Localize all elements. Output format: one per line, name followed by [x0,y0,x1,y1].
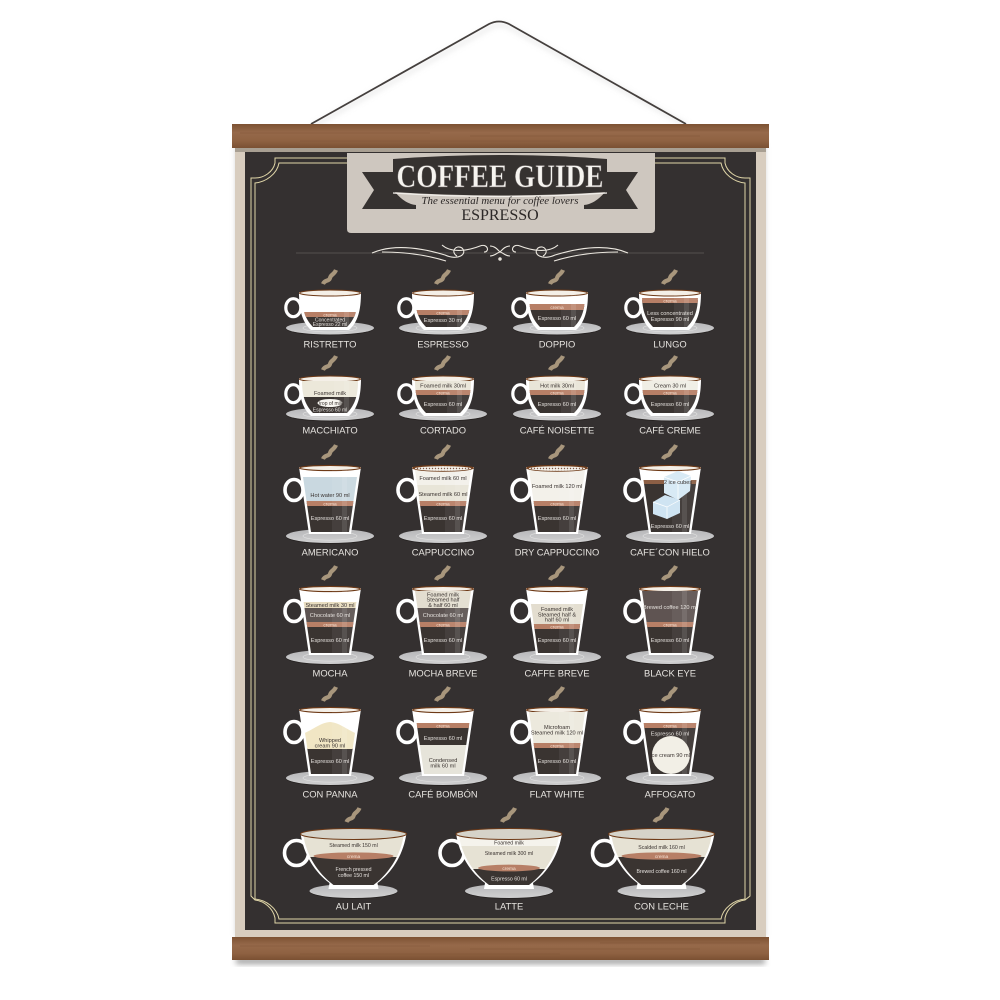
cup: caffe breve [512,566,601,678]
cup: lungo [626,270,714,350]
liquid layers [454,833,564,887]
drink name: RISTRETTO [304,338,356,350]
cup body with steam, handle and saucer [625,687,714,786]
drink name: AU LAIT [336,900,371,912]
decorative double gold border [251,158,750,923]
layer labels: crema [655,854,668,860]
layer labels: Espresso 60 ml [651,524,689,530]
cup: con panna [285,687,374,800]
layer labels: & half 60 ml [428,603,458,609]
cup body with steam, handle and saucer [512,445,601,544]
layer labels: Steamed milk 30 ml [305,603,355,609]
drink name: CAFE´CON HIELO [630,546,710,558]
cup body with steam, handle and saucer [398,566,487,665]
layer labels: half 60 ml [545,618,569,624]
liquid layers [642,381,698,413]
cup body with steam, handle and saucer [399,270,487,335]
cup: cafe creme [626,356,714,436]
hanging wire [311,22,688,126]
layer labels: crema [436,501,450,507]
bottom wooden bar [232,937,769,964]
layer labels [636,845,687,875]
cup body with steam, handle and saucer [592,808,714,899]
drink name: LATTE [495,900,523,912]
layer labels: Espresso 60 ml [424,736,462,742]
cup body with steam, handle and saucer [285,445,374,544]
drink name: ESPRESSO [417,338,469,350]
cup body with steam, handle and saucer [626,270,714,335]
layer labels: Espresso 60 ml [311,759,349,765]
ornament flourish [296,245,704,261]
layer labels [538,384,576,408]
layer labels: Brewed coffee 160 ml [636,869,687,875]
layer labels [650,723,690,759]
layer labels: Espresso 60 ml [311,516,349,522]
layer labels: Espresso 60 ml [651,732,689,738]
cup: mocha breve [398,566,487,678]
layer labels: Espresso 60 ml [651,402,689,408]
layer labels: Chocolate 60 ml [423,613,463,619]
layer labels: Espresso 60 ml [424,516,462,522]
cup body with steam, handle and saucer [625,445,714,544]
liquid layers [303,470,357,532]
cup: ristretto [286,270,374,350]
layer labels: Espresso 60 ml [651,638,689,644]
layer labels: Steamed half & [538,612,576,618]
layer labels: Foamed milk [541,607,573,613]
layer labels: crema [550,390,564,396]
layer labels: Hot water 90 ml [310,493,350,499]
liquid layers [416,723,470,774]
cup: americano [285,445,374,558]
layer labels: Less concentrated [647,311,693,317]
layer labels [485,840,533,882]
layer labels: Steamed milk 120 ml [531,730,583,736]
layer labels [424,723,462,769]
layer labels: crema [663,390,677,396]
layer labels [643,605,697,644]
cup body with steam, handle and saucer [398,445,487,544]
drink name: AMERICANO [302,546,358,558]
layer labels: Foamed milk [314,391,346,397]
cup: latte [440,808,564,912]
layer labels: crema [502,866,516,872]
layer labels: Espresso 60 ml [491,876,527,882]
layer labels: crema [436,622,450,628]
drink name: CORTADO [420,424,466,436]
layer labels: Foamed milk 60 ml [419,476,467,482]
liquid layers [416,295,470,327]
cup body with steam, handle and saucer [513,356,601,421]
rim [300,828,406,840]
layer labels: crema [663,298,677,304]
layer labels: crema [323,501,337,507]
layer labels [418,476,468,522]
liquid layers [415,591,471,653]
layer labels: Hot milk 30ml [540,384,574,390]
drink name: CON PANNA [302,788,358,800]
layer labels [647,298,693,323]
liquid layers [530,295,584,327]
layer labels: Steamed milk 150 ml [329,843,378,849]
liquid layers [529,470,585,532]
cup: con leche [592,808,716,912]
layer labels [311,738,349,765]
title plate [347,153,655,233]
cup: black eye [625,566,714,678]
layer labels [424,310,462,324]
drink name: CAPPUCCINO [412,546,474,558]
layer labels: Steamed milk 60 ml [418,492,468,498]
layer labels: Whipped [319,738,341,744]
layer labels: Espresso 22 ml [313,322,347,328]
foam top [528,466,586,471]
layer labels [420,384,466,408]
layer labels: cream 90 ml [315,743,345,749]
cup body with steam, handle and saucer [398,687,487,786]
liquid layers [531,591,583,653]
layer labels [310,493,350,522]
liquid layers [415,381,471,413]
layer labels: crema [550,305,564,311]
liquid layers [415,470,471,532]
cup body with steam, handle and saucer [440,808,562,899]
liquid layers [298,833,408,887]
layer labels: 2 ice cubes [664,480,692,486]
layer labels [423,592,463,644]
layer labels: Espresso 60 ml [538,759,576,765]
rim [608,828,714,840]
ice cream scoop [652,736,690,774]
layer labels: Espresso 30 ml [424,318,462,324]
cup body with steam, handle and saucer [513,270,601,335]
cup body with steam, handle and saucer [284,808,406,899]
cup: affogato [625,687,714,800]
layer labels: Cream 30 ml [654,384,686,390]
liquid layers [643,470,697,532]
liquid layers [529,712,585,774]
layer labels [532,484,582,522]
drink name: CAFFE BREVE [524,668,590,678]
cup body with steam, handle and saucer [286,356,374,421]
cup: cafe con hielo [625,445,714,558]
layer labels: coffee 150 ml [338,873,369,879]
drink name: MOCHA BREVE [409,668,477,678]
layer labels: crema [323,622,337,628]
layer labels [538,305,576,322]
liquid layers [642,295,698,327]
foam top [414,466,472,471]
layer labels: crema [436,310,450,316]
cup: mocha [285,566,374,678]
title text: COFFEE GUIDE [396,159,604,195]
layer labels: Espresso 60 ml [538,402,576,408]
layer labels: crema [663,723,677,729]
cup: macchiato [286,356,374,436]
layer labels: Microfoam [544,725,570,731]
layer labels [313,312,347,328]
layer labels: milk 60 ml [430,763,456,769]
drink name: DRY CAPPUCCINO [515,546,599,558]
rim [456,828,562,840]
ice cubes [653,471,691,519]
cup body with steam, handle and saucer [285,687,374,786]
layer labels [651,480,692,530]
liquid layers [302,381,358,413]
layer labels: Drop of milk [317,401,344,407]
layer labels: Espresso 60 ml [424,638,462,644]
cup body with steam, handle and saucer [625,566,714,665]
layer labels [538,607,576,644]
drink name: MOCHA [313,668,348,678]
cup body with steam, handle and saucer [285,566,374,665]
layer labels: Foamed milk [494,840,524,846]
layer labels: Espresso 90 ml [651,317,689,323]
layer labels: crema [347,854,360,860]
liquid layers [304,591,356,653]
layer labels: Espresso 60 ml [311,638,349,644]
drink name: MACCHIATO [302,424,358,436]
layer labels: crema [436,723,450,729]
drink name: CAFÉ NOISETTE [520,424,594,436]
layer labels [313,391,347,414]
ribbon banner [362,155,638,209]
cup body with steam, handle and saucer [399,356,487,421]
drink name: CON LECHE [634,900,689,912]
layer labels: Espresso 60 ml [538,316,576,322]
liquid layers [642,591,698,653]
liquid layers [305,712,355,774]
liquid layers [606,833,716,887]
layer labels: Foamed milk 120 ml [532,484,582,490]
layer labels [305,603,355,644]
layer labels: Espresso 60 ml [538,638,576,644]
layer labels: Foamed milk 30ml [420,384,466,390]
drink name: LUNGO [653,338,687,350]
drink name: CAFÉ CREME [639,424,701,436]
liquid layers [644,712,696,774]
drink name: DOPPIO [539,338,575,350]
layer labels: crema [323,312,337,318]
layer labels [651,384,689,408]
layer labels: Espresso 60 ml [424,402,462,408]
layer labels: crema [550,501,564,507]
layer labels: crema [550,743,564,749]
cup: cortado [399,356,487,436]
cup body with steam, handle and saucer [626,356,714,421]
cup: flat white [512,687,601,800]
layer labels: crema [663,622,677,628]
poster paper [235,145,766,937]
layer labels: Scalded milk 160 ml [638,845,685,851]
subtitle: The essential menu for coffee lovers [422,195,578,207]
cup body with steam, handle and saucer [512,687,601,786]
layer labels: Ice cream 90 ml [650,753,690,759]
layer labels: Condensed [429,758,457,764]
layer labels: Brewed coffee 120 ml [643,605,697,611]
layer labels: French pressed [335,867,372,873]
cup body with steam, handle and saucer [512,566,601,665]
layer labels: Foamed milk [427,592,459,598]
layer labels: Espresso 60 ml [538,516,576,522]
cup: espresso [399,270,487,350]
layer labels: Espresso 60 ml [313,408,347,414]
layer labels [531,725,583,765]
drink name: AFFOGATO [645,788,695,800]
category heading: ESPRESSO [461,207,539,224]
layer labels: Chocolate 60 ml [310,613,350,619]
liquid layers [304,295,356,327]
layer labels: Steamed milk 300 ml [485,851,533,857]
top wooden bar [232,124,769,148]
layer labels: Steamed half [427,598,460,604]
drink name: CAFÉ BOMBÓN [408,788,478,800]
cup: cafe bombon [398,687,487,800]
layer labels: Concentrated [315,318,345,324]
drink name: FLAT WHITE [530,788,584,800]
cup: dry cappuccino [512,445,601,558]
layer labels [329,843,378,879]
layer labels: crema [436,390,450,396]
cup: doppio [513,270,601,350]
liquid layers [529,381,585,413]
cup body with steam, handle and saucer [286,270,374,335]
drink name: BLACK EYE [644,668,696,678]
cup: cappuccino [398,445,487,558]
cup: au lait [284,808,408,912]
cup: cafe noisette [513,356,601,436]
layer labels: crema [550,624,564,630]
